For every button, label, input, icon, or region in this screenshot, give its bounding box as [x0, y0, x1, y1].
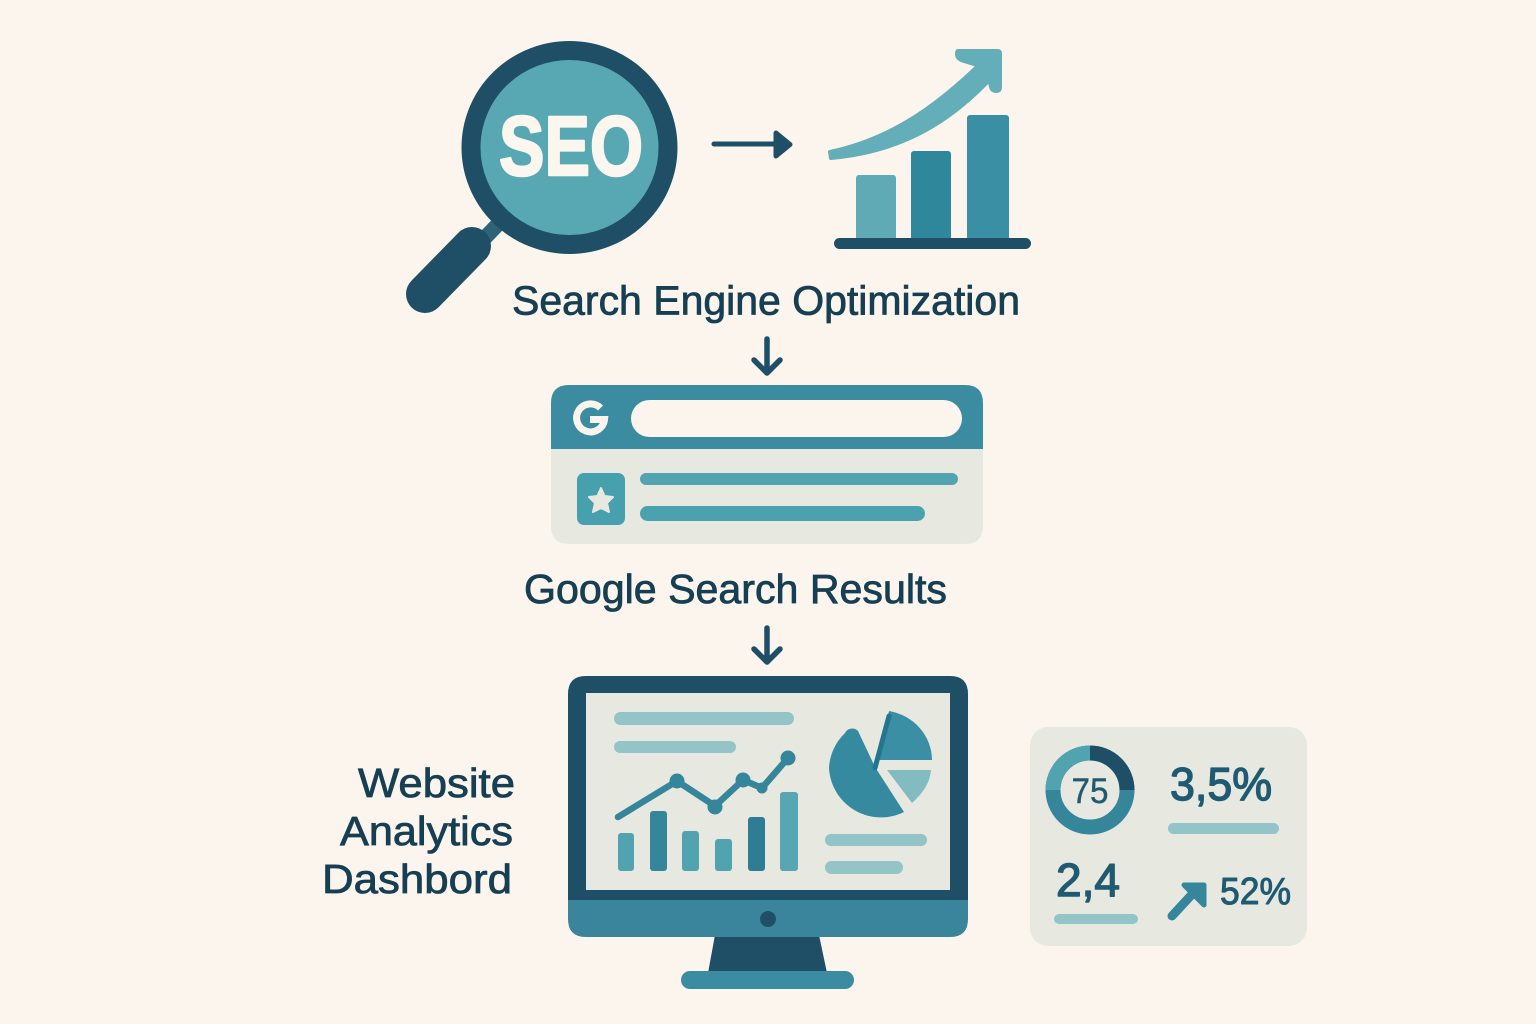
bar 1	[856, 175, 896, 240]
search box	[631, 400, 962, 437]
magnifier handle	[425, 246, 472, 294]
arrow: SEO to growth	[714, 133, 790, 156]
heading: Website Analytics Dashbord: Analytics	[340, 808, 513, 854]
heading: Google Search Results: Google Search Results	[524, 566, 947, 612]
bar 3	[967, 115, 1009, 240]
monitor frame	[568, 676, 968, 900]
search header	[551, 385, 983, 449]
metric 2,4: 2,4	[1056, 854, 1120, 906]
heading: Website Analytics Dashbord	[322, 760, 515, 902]
SEO label: SEO	[499, 99, 643, 193]
dashboard line chart	[618, 750, 796, 817]
result line 2	[640, 506, 925, 521]
heading: Search Engine Optimization: Search Engine Optimization	[512, 278, 1020, 324]
results body	[551, 448, 983, 544]
icon: desktop monitor dashboard	[568, 676, 968, 989]
icon: up-right arrow head	[1184, 885, 1204, 905]
metric bar 2	[1054, 914, 1138, 924]
screen	[586, 693, 950, 890]
bar 2	[911, 151, 951, 240]
donut score 75: 75	[1072, 772, 1108, 811]
arrow: down to dashboard	[754, 628, 780, 662]
arrow: down to search results	[754, 339, 780, 373]
heading: Website Analytics Dashbord: Website	[358, 760, 515, 806]
magnifier neck	[476, 216, 506, 247]
magnifier lens	[471, 50, 668, 244]
power button	[760, 911, 776, 927]
dashboard pie chart	[829, 711, 932, 817]
icon: Google G	[577, 404, 604, 432]
metric bar 1	[1168, 823, 1279, 834]
dashboard bars	[618, 792, 798, 871]
panel: Google search results	[551, 385, 983, 544]
icon: star tile	[577, 473, 625, 525]
panel: metrics card	[1030, 727, 1307, 946]
result line 1	[640, 473, 958, 485]
monitor chin	[568, 899, 968, 937]
heading: Website Analytics Dashbord: Dashbord	[322, 856, 512, 902]
chart: growth bars and arrow	[830, 51, 1031, 249]
monitor base	[681, 971, 854, 989]
donut score 75	[1053, 753, 1127, 827]
screen text lines	[614, 712, 927, 874]
metric 3,5%: 3,5%	[1170, 758, 1272, 810]
icon: up-right arrow	[1172, 889, 1197, 916]
icon: SEO magnifying glass	[425, 50, 668, 294]
metric 52%: 52%	[1220, 871, 1291, 913]
monitor stand	[708, 935, 827, 973]
growth arrow	[830, 51, 1000, 158]
chart baseline	[834, 238, 1031, 249]
